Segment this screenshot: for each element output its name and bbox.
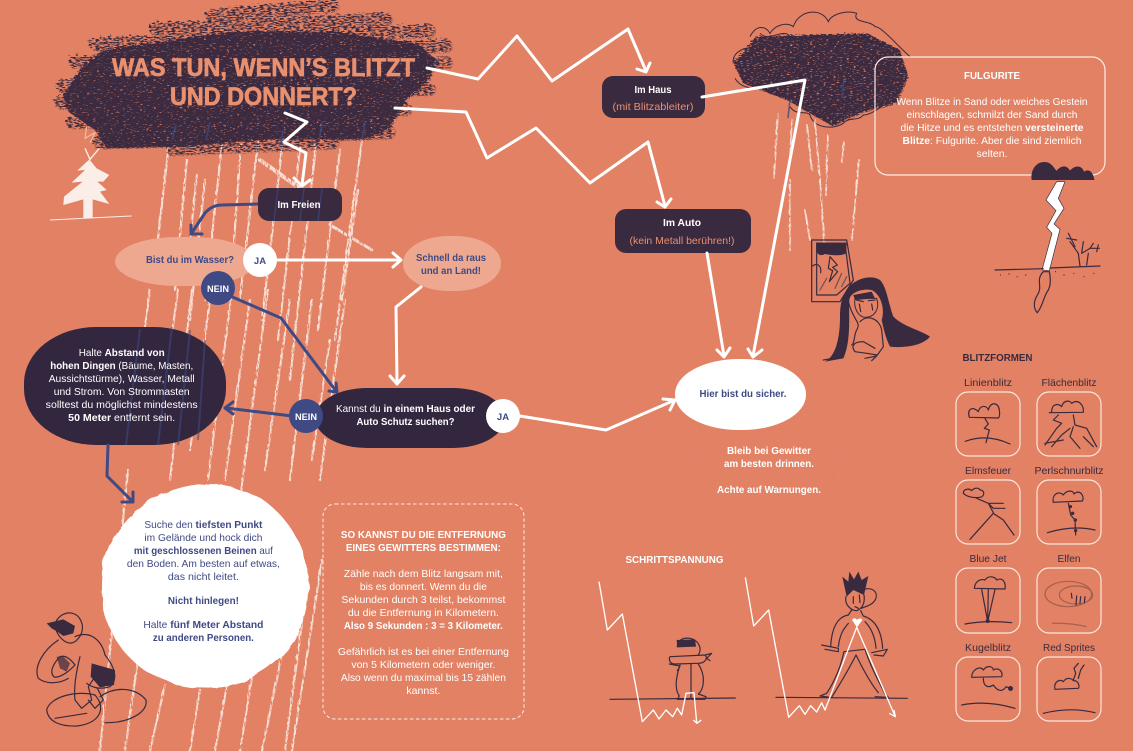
panel: Entfernung bestimmen: bis es donnert. Wenn du die: [360, 581, 487, 593]
panel: Abstand halten: und Strom. Von Strommasten: [54, 386, 190, 398]
panel: Abstand halten: solltest du möglichst mindestens: [46, 399, 198, 411]
panel: tiefster Punkt: [101, 484, 309, 688]
box: Im Freien: [258, 188, 342, 221]
chalk rain: [100, 135, 372, 751]
panel: tiefster Punkt: den Boden. Am besten auf etwas,: [127, 558, 280, 570]
box: Im Haus: [602, 76, 705, 118]
card: Kugelblitz: [956, 642, 1020, 721]
text: drinnen bleiben: Bleib bei Gewitter: [727, 445, 811, 457]
panel: Kannst du Schutz suchen: [315, 388, 505, 448]
card: Blue Jet: Blue Jet: [970, 553, 1007, 565]
badge: NEIN: [201, 271, 235, 305]
panel: Entfernung bestimmen: Also 9 Sekunden : 3 = 3 Kilometer.: [344, 620, 503, 632]
card: Perlschnurblitz: Perlschnurblitz: [1034, 465, 1104, 477]
panel: Fulgurite: die Hitze und es entstehen versteinerte: [900, 122, 1084, 134]
pill: Schnell da raus: und an Land!: [421, 265, 481, 277]
badge: NEIN: NEIN: [295, 412, 317, 423]
panel: tiefster Punkt: mit geschlossenen Beinen auf: [134, 545, 273, 557]
card: Linienblitz: Linienblitz: [964, 377, 1012, 389]
panel: Entfernung bestimmen: du die Entfernung in Kilometern.: [348, 607, 499, 619]
illustration: step voltage crouching: [599, 582, 735, 723]
panel: Hier bist du sicher: [675, 359, 806, 430]
arrow: title to Im Haus: [427, 29, 650, 81]
arrow: JA to safe: [520, 399, 675, 430]
arrow: title to Im Freien: [284, 113, 310, 186]
arrow: land to shelter question: [390, 287, 421, 384]
pill: Bist du im Wasser: [115, 237, 255, 286]
badge: NEIN: NEIN: [207, 284, 229, 295]
text: drinnen bleiben: [699, 405, 839, 545]
card: Elmsfeuer: [956, 465, 1020, 544]
panel: Entfernung bestimmen: von 5 Kilometern oder weniger.: [351, 659, 495, 671]
arrow: NEIN to Abstand: [225, 402, 292, 416]
card: Elfen: Elfen: [1058, 553, 1081, 565]
card: Red Sprites: Red Sprites: [1043, 642, 1095, 654]
arrow: Im Haus to safe: [702, 80, 805, 357]
box: Im Auto: (kein Metall berühren!): [630, 235, 734, 247]
arrow: NEIN to shelter question: [230, 296, 337, 392]
pill: Bist du im Wasser: Bist du im Wasser?: [146, 254, 234, 266]
heading: Schrittspannung: SCHRITTSPANNUNG: [626, 554, 724, 566]
title: [112, 54, 415, 111]
heading: Blitzformen: BLITZFORMEN: [962, 352, 1032, 364]
box: Im Auto: [615, 209, 751, 253]
rain below top-right cloud: [774, 113, 859, 250]
panel: Fulgurite: FULGURITE: [964, 70, 1020, 82]
panel: Entfernung bestimmen: Gefährlich ist es bei einer Entfernung: [338, 646, 509, 658]
illustration: step voltage standing: [745, 572, 907, 717]
badge: JA: [486, 399, 520, 433]
panel: Hier bist du sicher: Hier bist du sicher.: [700, 388, 787, 400]
illustration: child at window: [812, 240, 930, 362]
panel: Fulgurite: Blitze: Fulgurite. Aber die sind ziemlich: [902, 135, 1082, 147]
panel: Entfernung bestimmen: Sekunden durch 3 teilst, bekommst: [341, 594, 505, 606]
badge: NEIN: [289, 399, 323, 433]
panel: Fulgurite: [875, 57, 1105, 175]
card: Linienblitz: [956, 377, 1020, 456]
panel: tiefster Punkt: zu anderen Personen.: [153, 632, 254, 644]
cloud: title: [62, 7, 447, 150]
arrow: title to Im Auto: [395, 108, 671, 207]
panel: Fulgurite: einschlagen, schmilzt der Sand durch: [906, 109, 1078, 121]
box: Im Auto: Im Auto: [663, 217, 701, 229]
navy rain showing through: [172, 80, 844, 145]
panel: Entfernung bestimmen: [323, 504, 524, 719]
panel: Kannst du Schutz suchen: Kannst du in einem Haus oder: [336, 403, 475, 415]
card: Kugelblitz: Kugelblitz: [965, 642, 1011, 654]
illustration: fulgurite lightning: [995, 162, 1100, 313]
panel: tiefster Punkt: im Gelände und hock dich: [144, 532, 263, 544]
arrow: Im Freien to water question: [191, 204, 258, 234]
badge: JA: JA: [497, 412, 509, 423]
arrow: Abstand to tiefster Punkt: [107, 445, 133, 502]
pill: Schnell da raus: [403, 236, 501, 291]
panel: Entfernung bestimmen: EINES GEWITTERS BESTIMMEN:: [346, 542, 501, 554]
panel: Abstand halten: hohen Dingen (Bäume, Masten,: [50, 360, 193, 372]
panel: Abstand halten: Halte Abstand von: [79, 347, 165, 359]
box: Im Freien: Im Freien: [278, 199, 320, 211]
panel: tiefster Punkt: Halte fünf Meter Abstand: [143, 619, 263, 631]
panel: tiefster Punkt: das nicht leitet.: [168, 571, 239, 583]
badge: JA: JA: [254, 256, 266, 267]
arrow: JA to land: [277, 253, 401, 267]
illustration: crouching child: [37, 613, 146, 726]
panel: Abstand halten: Aussichtstürme), Wasser, Metall: [49, 373, 195, 385]
box: Im Haus: (mit Blitzableiter): [612, 101, 694, 113]
box: Im Haus: Im Haus: [634, 84, 672, 96]
card: Flächenblitz: Flächenblitz: [1042, 377, 1096, 389]
panel: Fulgurite: selten.: [976, 148, 1008, 160]
card: Red Sprites: [1037, 642, 1101, 721]
badge: JA: [243, 243, 277, 277]
card: Blue Jet: [956, 553, 1020, 633]
title: UND DONNERT?: [170, 83, 357, 111]
panel: Abstand halten: 50 Meter entfernt sein.: [68, 412, 175, 424]
text: drinnen bleiben: am besten drinnen.: [724, 458, 814, 470]
panel: Entfernung bestimmen: SO KANNST DU DIE ENTFERNUNG: [341, 529, 506, 541]
cloud: top right scribble: [733, 12, 910, 127]
panel: Entfernung bestimmen: Zähle nach dem Blitz langsam mit,: [344, 568, 503, 580]
title: WAS TUN, WENN’S BLITZT: [112, 54, 415, 82]
card: Flächenblitz: [1037, 377, 1101, 456]
panel: tiefster Punkt: Suche den tiefsten Punkt: [144, 519, 263, 531]
panel: Kannst du Schutz suchen: Auto Schutz suchen?: [356, 416, 454, 428]
panel: tiefster Punkt: Nicht hinlegen!: [168, 595, 239, 607]
icon: tree: [50, 127, 132, 220]
card: Elfen: [1037, 553, 1101, 633]
panel: Entfernung bestimmen: kannst.: [406, 685, 440, 697]
text: drinnen bleiben: Achte auf Warnungen.: [717, 484, 821, 496]
card: Perlschnurblitz: [1034, 465, 1104, 544]
panel: Fulgurite: Wenn Blitze in Sand oder weiches Gestein: [896, 96, 1088, 108]
panel: Abstand halten: [24, 327, 226, 445]
panel: Entfernung bestimmen: Also wenn du maximal bis 15 zählen: [341, 672, 506, 684]
arrow: Im Auto to safe: [707, 253, 730, 357]
card: Elmsfeuer: Elmsfeuer: [965, 465, 1011, 477]
pill: Schnell da raus: Schnell da raus: [416, 252, 486, 264]
